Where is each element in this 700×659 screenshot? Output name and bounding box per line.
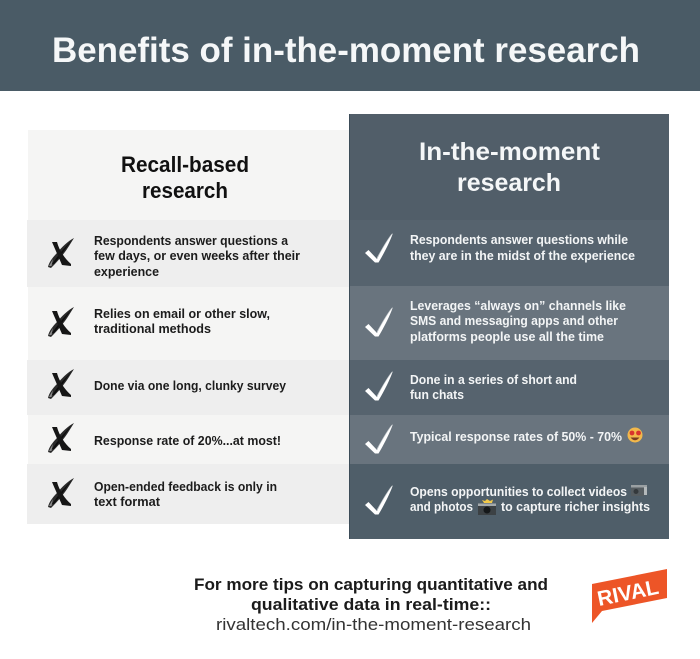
row: in-the-moment timing — [365, 232, 635, 263]
row: in-the-moment response rate: Typical response rates of 50% - 70% — [410, 429, 622, 444]
panel: in-the-moment research — [349, 114, 669, 539]
row: in-the-moment media: Opens opportunities to collect videos — [410, 484, 627, 499]
row: in-the-moment media: and photos — [410, 499, 473, 514]
call to action: qualitative data in real-time:: — [251, 596, 491, 614]
header banner — [0, 0, 700, 91]
row: recall response rate: Response rate of 20%...at most! — [94, 433, 281, 448]
heading: recall-based research: Recall-based — [121, 152, 249, 177]
logo: Rival: RIVAL — [595, 576, 661, 611]
row: recall timing: Respondents answer questions a — [94, 233, 289, 248]
icon: video camera — [631, 485, 647, 496]
heading: in-the-moment research: research — [457, 169, 561, 197]
row: in-the-moment channels: SMS and messaging apps and other — [410, 313, 618, 328]
panel: recall-based research — [27, 130, 349, 524]
row: in-the-moment media — [365, 484, 650, 515]
row: in-the-moment timing: they are in the midst of the experience — [410, 248, 635, 263]
row: recall channels — [48, 306, 270, 337]
heading: recall-based research — [121, 152, 249, 203]
row: in-the-moment channels: Leverages “always on” channels like — [410, 298, 626, 313]
row: in-the-moment channels — [365, 298, 626, 344]
call to action: For more tips on capturing quantitative and — [194, 576, 548, 594]
row: in-the-moment chats: fun chats — [410, 387, 464, 402]
row: recall response rate — [48, 423, 281, 453]
row: recall survey: Done via one long, clunky survey — [94, 378, 287, 393]
heading: in-the-moment research — [419, 138, 601, 197]
icon: heart-eyes emoji — [628, 428, 642, 442]
row: recall survey — [48, 369, 287, 399]
row: recall feedback: text format — [94, 494, 161, 509]
heading: in-the-moment research: In-the-moment — [419, 138, 601, 166]
row: recall timing: few days, or even weeks after their — [94, 248, 300, 263]
call to action — [194, 576, 548, 634]
row: recall feedback — [48, 478, 277, 509]
row: in-the-moment response rate — [365, 424, 642, 454]
title: Benefits of in-the-moment research — [52, 31, 640, 70]
row: in-the-moment chats — [365, 371, 577, 402]
heading: recall-based research: research — [142, 178, 228, 203]
logo: Rival — [592, 569, 667, 623]
icon: camera with flash — [478, 499, 496, 515]
row: in-the-moment chats: Done in a series of short and — [410, 372, 577, 387]
row: recall channels: traditional methods — [94, 321, 211, 336]
row: in-the-moment media: to capture richer insights — [501, 499, 650, 514]
row: recall timing: experience — [94, 264, 159, 279]
call to action: rivaltech.com/in-the-moment-research — [216, 616, 531, 634]
row: recall timing — [48, 233, 300, 279]
row: recall channels: Relies on email or other slow, — [94, 306, 270, 321]
row: recall feedback: Open-ended feedback is only in — [94, 479, 277, 494]
row: in-the-moment timing: Respondents answer questions while — [410, 232, 628, 247]
row: in-the-moment channels: platforms people use all the time — [410, 329, 604, 344]
